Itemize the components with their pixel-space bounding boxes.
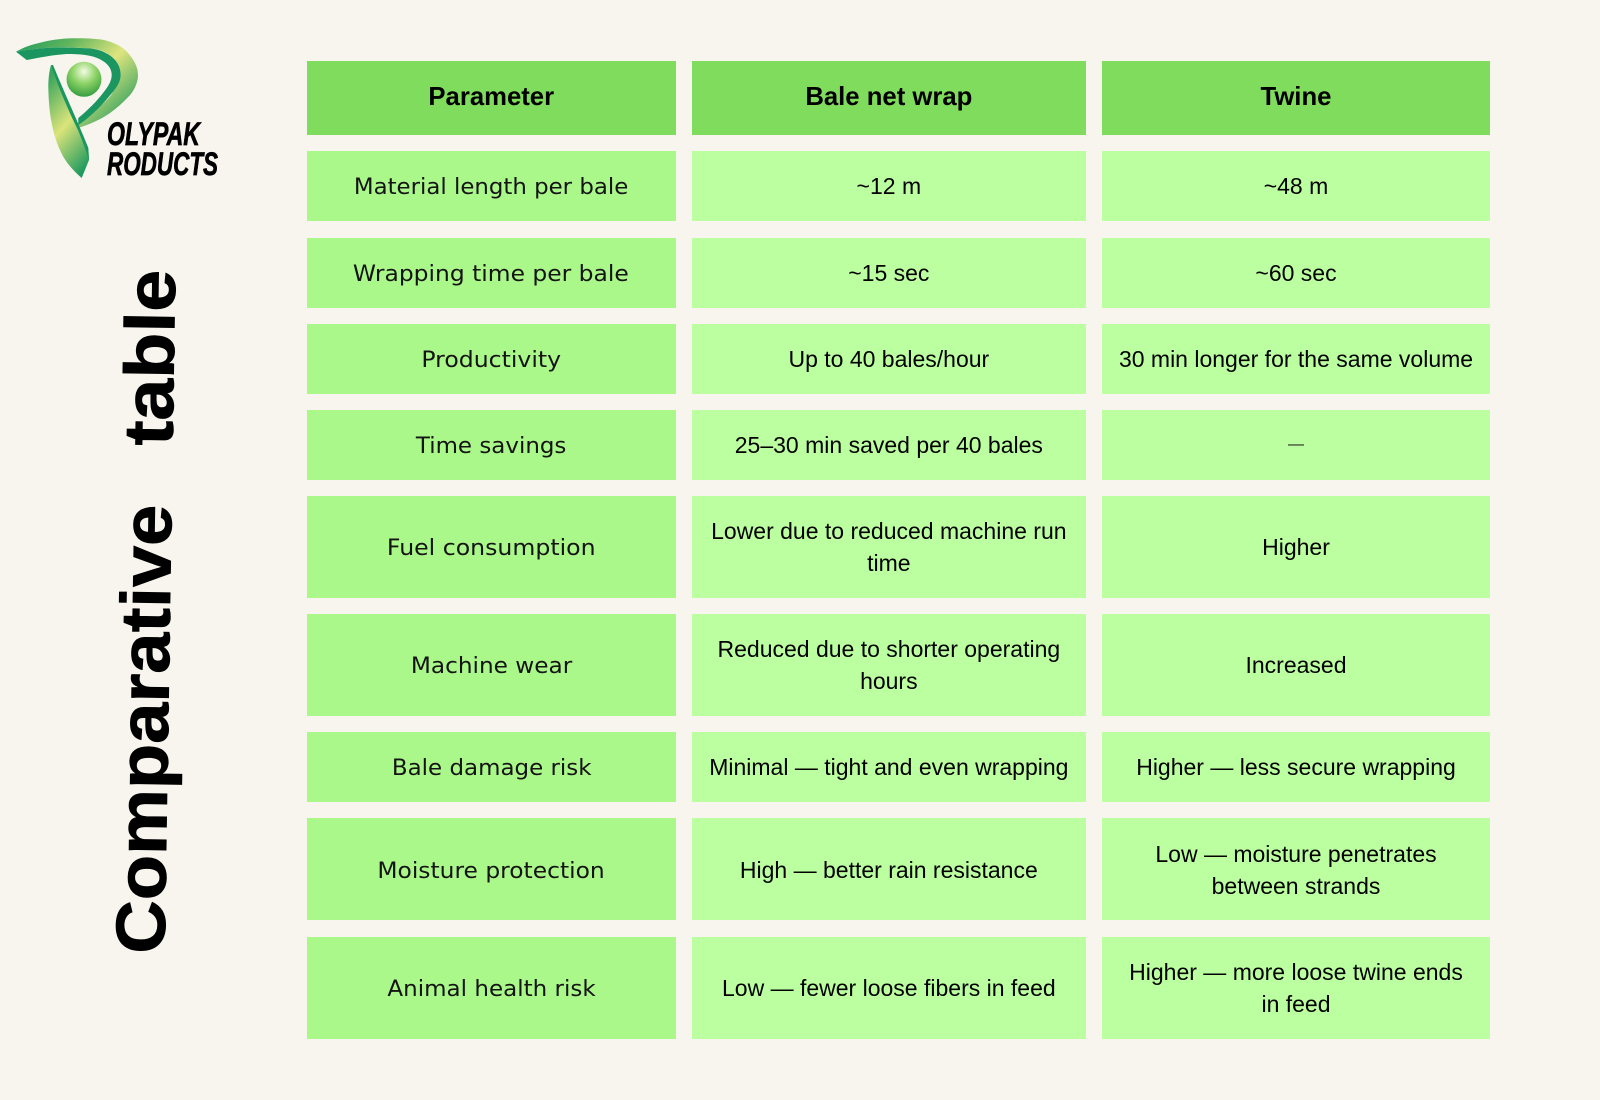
table header: Twine (1102, 61, 1490, 135)
net wrap: bale damage risk (692, 732, 1086, 802)
twine: moisture protection (1102, 818, 1490, 920)
twine: fuel consumption (1102, 496, 1490, 598)
twine: machine wear: Increased (1245, 652, 1346, 678)
twine: machine wear (1102, 614, 1490, 716)
logo wordmark: RODUCTS (107, 146, 218, 182)
net wrap: machine wear (692, 614, 1086, 716)
net wrap: machine wear: hours (860, 668, 918, 694)
net wrap: productivity: Up to 40 bales/hour (788, 346, 989, 372)
table header: Parameter: Parameter (428, 83, 554, 111)
row label: Time savings (306, 410, 676, 480)
twine: wrapping time (1102, 238, 1490, 308)
row label: Material length per bale: Material length per bale (354, 175, 628, 200)
net wrap: wrapping time: ~15 sec (848, 260, 929, 286)
row label: Wrapping time per bale (306, 238, 676, 308)
logo wordmark: OLYPAK (107, 116, 202, 152)
twine: moisture protection: Low — moisture penetrates (1155, 841, 1437, 867)
row label: Productivity (306, 324, 676, 394)
row label: Machine wear (306, 614, 676, 716)
net wrap: material length (692, 151, 1086, 221)
twine: moisture protection: between strands (1212, 873, 1380, 899)
net wrap: fuel consumption: Lower due to reduced machine run (711, 518, 1067, 544)
twine: time savings (1102, 410, 1490, 480)
row label: Moisture protection: Moisture protection (378, 859, 605, 884)
row label: Machine wear: Machine wear (411, 654, 572, 679)
table header: Bale net wrap: Bale net wrap (805, 83, 972, 111)
row label: Moisture protection (306, 818, 676, 920)
net wrap: time savings: 25–30 min saved per 40 bales (735, 432, 1043, 458)
twine: material length (1102, 151, 1490, 221)
twine: wrapping time: ~60 sec (1255, 260, 1337, 286)
table header: Twine: Twine (1261, 83, 1331, 111)
net wrap: moisture protection (692, 818, 1086, 920)
net wrap: moisture protection: High — better rain resistance (740, 857, 1038, 883)
net wrap: fuel consumption (692, 496, 1086, 598)
row label: Animal health risk (306, 937, 676, 1039)
row label: Bale damage risk: Bale damage risk (391, 756, 591, 781)
net wrap: animal health risk (692, 937, 1086, 1039)
net wrap: fuel consumption: time (867, 550, 911, 576)
row label: Fuel consumption: Fuel consumption (387, 536, 596, 561)
twine: bale damage risk: Higher — less secure wrapping (1136, 754, 1456, 780)
twine: fuel consumption: Higher (1262, 534, 1330, 560)
row label: Fuel consumption (306, 496, 676, 598)
net wrap: time savings (692, 410, 1086, 480)
logo mark: P swoosh (16, 38, 138, 178)
net wrap: wrapping time (692, 238, 1086, 308)
logo wordmark (107, 116, 218, 182)
twine: productivity: 30 min longer for the same volume (1119, 346, 1473, 372)
row label: Bale damage risk (306, 732, 676, 802)
row label: Time savings: Time savings (416, 434, 566, 459)
net wrap: animal health risk: Low — fewer loose fibers in feed (722, 975, 1056, 1001)
twine: animal health risk (1102, 937, 1490, 1039)
title: Comparative table (rotated): Comparative (102, 504, 187, 954)
row label: Material length per bale (306, 151, 676, 221)
row label: Productivity: Productivity (421, 348, 561, 373)
net wrap: machine wear: Reduced due to shorter operating (718, 636, 1060, 662)
net wrap: productivity (692, 324, 1086, 394)
net wrap: material length: ~12 m (857, 173, 921, 199)
twine: animal health risk: in feed (1261, 990, 1331, 1016)
twine: animal health risk: Higher — more loose twine ends (1129, 959, 1463, 985)
net wrap: bale damage risk: Minimal — tight and even wrapping (709, 754, 1068, 780)
logo: Polypak Products (16, 38, 218, 182)
title: Comparative table (rotated): table (110, 269, 190, 446)
table header: Bale net wrap (692, 61, 1086, 135)
twine: bale damage risk (1102, 732, 1490, 802)
row label: Wrapping time per bale: Wrapping time per bale (353, 262, 629, 286)
row label: Animal health risk: Animal health risk (387, 977, 595, 1002)
twine: time savings: — (1288, 436, 1304, 453)
title: Comparative table (rotated) (102, 269, 190, 954)
table header: Parameter (306, 61, 676, 135)
twine: material length: ~48 m (1264, 173, 1328, 199)
twine: productivity (1102, 324, 1490, 394)
